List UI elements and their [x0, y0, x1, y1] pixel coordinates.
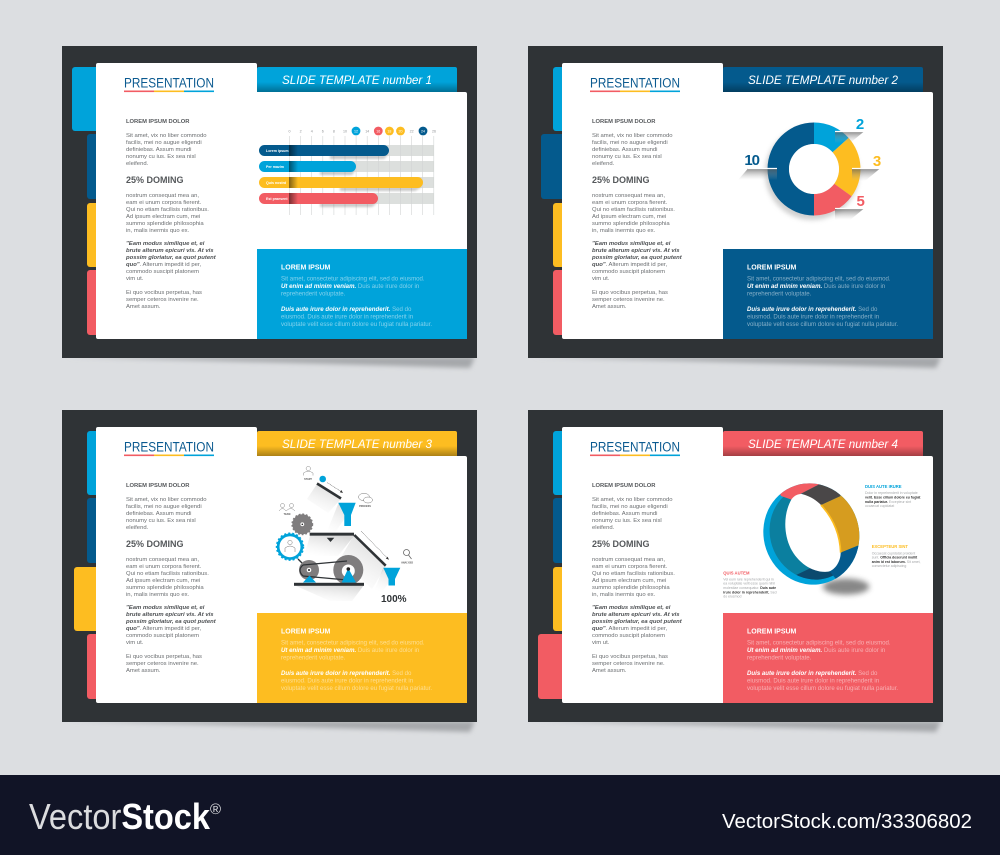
slide 1 colored text panel: LOREM IPSUM: [281, 264, 331, 272]
bar chart: Lorem ipsum: [266, 149, 289, 153]
footer logo: VectorStock: [29, 796, 211, 837]
bar chart: 26: [432, 129, 436, 133]
slide 4 header tab: [723, 431, 923, 458]
slide 4 body text: [591, 483, 683, 674]
slide 4 body text: commodo suscipit platonem: [592, 633, 665, 639]
bar chart: [259, 127, 436, 215]
slide 4 colored text panel: Ut enim ad minim veniam. Duis aute irure dolor in: [747, 647, 885, 654]
3D ring chart: [763, 483, 872, 599]
slide 4 body text: "Eam modus similique et, ei: [592, 605, 671, 611]
slide 4 body text: Sit amet, vix no liber commodo: [592, 497, 673, 503]
slide 3 body text: Qui no etiam facilisis rationibus.: [126, 571, 209, 577]
slide 3 colored text panel: Duis aute irure dolor in reprehenderit. Sed do: [281, 670, 412, 677]
registered mark: ®: [210, 801, 221, 818]
slide 3 body text: Sit amet, vix no liber commodo: [126, 497, 207, 503]
bar chart: Quis nostrd: [266, 181, 286, 185]
blue funnel 1: [338, 503, 356, 526]
slide 3 body text: in, malis inermis quo ex.: [126, 592, 190, 598]
slide 3 body text: vim ut.: [126, 640, 144, 646]
slide 2 header tab: [723, 67, 923, 94]
slide 2 body text: eleifend.: [592, 161, 615, 167]
slide 4 body text: nostrum consequat mea an,: [592, 557, 665, 563]
top conveyor with ball: [317, 476, 343, 498]
slide 2 body text: Ad ipsum electram cum, mei: [592, 214, 666, 220]
slide 2 body text: definiebas. Assum mundi: [592, 147, 658, 153]
slide 4 colored text panel: reprehenderit voluptate.: [747, 654, 812, 662]
slide 3 body text: nostrum consequat mea an,: [126, 557, 199, 563]
icon: chat bubbles: PROCESS: [359, 505, 371, 508]
slide 3 colored text panel: voluptate velit esse cillum dolore eu fugiat nulla pariatur.: [281, 685, 432, 692]
bar chart: 0: [288, 129, 290, 133]
slide 2 body text: summo splendide philosophia: [592, 221, 670, 227]
label 2: 2: [856, 116, 864, 133]
bar chart: 2: [300, 129, 302, 133]
slide 2 tab title: SLIDE TEMPLATE number 2: [748, 73, 898, 87]
slide 1 right white panel: [250, 92, 467, 339]
slide 2 colored text panel: reprehenderit voluptate.: [747, 290, 812, 298]
slide 2 presentation heading: PRESENTATION: [590, 76, 680, 90]
100 percent label: 100%: [381, 594, 407, 605]
slide 3 body text: possim gloriatur, ea quot putent: [125, 619, 217, 625]
slide 1 body text: semper ceteros invenire ne.: [126, 297, 199, 303]
callout: quis autem: do eiusmod: [723, 594, 741, 598]
slide 1 body text: definiebas. Assum mundi: [126, 147, 192, 153]
slide 1 colored text panel: voluptate velit esse cillum dolore eu fugiat nulla pariatur.: [281, 321, 432, 328]
slide 4 body text: possim gloriatur, ea quot putent: [591, 619, 683, 625]
slide 4 body text: definiebas. Assum mundi: [592, 511, 658, 517]
slide 3 body text: commodo suscipit platonem: [126, 633, 199, 639]
callout: quis autem: [723, 570, 777, 598]
slide 2 body text: possim gloriatur, ea quot putent: [591, 255, 683, 261]
slide 1 body text: Ad ipsum electram cum, mei: [126, 214, 200, 220]
callout: duis aute irure: Dolor in reprehenderit in voluptate: [865, 491, 918, 495]
bar chart: 4: [311, 129, 313, 133]
slide 4 body text: in, malis inermis quo ex.: [592, 592, 656, 598]
slide 4 body text: nonumy cu ius. Ex sea nisl: [592, 518, 662, 524]
slide 1 body text: quo". Alterum impedit id per,: [126, 262, 202, 268]
wheel hub: [346, 567, 350, 571]
bar chart: 18: [387, 129, 391, 133]
slide 3 body text: LOREM IPSUM DOLOR: [126, 483, 190, 489]
slide 3 dark frame: [62, 410, 477, 722]
slide 1 body text: facilis, mei no augue eligendi: [126, 140, 202, 146]
slide 2 colored text panel: Sit amet, consectetur adipiscing elit, sed do eiusmod.: [747, 276, 891, 282]
slide 4 body text: facilis, mei no augue eligendi: [592, 504, 668, 510]
slide 1 colored text panel: Sit amet, consectetur adipiscing elit, sed do eiusmod.: [281, 276, 425, 282]
slide 3 tab title: SLIDE TEMPLATE number 3: [282, 437, 432, 451]
bar chart: 8: [333, 129, 335, 133]
slide 3 body text: semper ceteros invenire ne.: [126, 661, 199, 667]
callout: duis aute irure: DUIS AUTE IRURE: [865, 484, 902, 489]
callout: excepteur sint: consectetur adipiscing: [872, 564, 906, 568]
callout: quis autem: Vel eum iure reprehenderit qui in: [723, 578, 774, 582]
slide 4 body text: vim ut.: [592, 640, 610, 646]
blue gear with person: [277, 534, 303, 560]
slide 2 dark frame: [528, 46, 943, 358]
callout: duis aute irure: [865, 484, 921, 508]
slide 2 colored text panel: Ut enim ad minim veniam. Duis aute irure dolor in: [747, 283, 885, 290]
callout: excepteur sint: sunt. Officia deserunt mollit: [872, 556, 918, 560]
slide 1 body text: Ei quo vocibus perpetua, has: [126, 290, 202, 296]
callout: duis aute irure: velit. Esse cillum dolore eu fugiat: [865, 496, 921, 500]
machine process diagram: [277, 466, 413, 605]
slide 4 colored text panel: Duis aute irure dolor in reprehenderit. Sed do: [747, 670, 878, 677]
sloped conveyor: [354, 531, 389, 566]
slide 4 side tabs: [538, 431, 568, 699]
slide 1 body text: [125, 119, 217, 310]
label 3: 3: [873, 153, 881, 170]
slide 4 body text: Ad ipsum electram cum, mei: [592, 578, 666, 584]
machine mounts: [303, 568, 356, 582]
slide 3 body text: nonumy cu ius. Ex sea nisl: [126, 518, 196, 524]
slide 1 body text: commodo suscipit platonem: [126, 269, 199, 275]
slide 3 body text: quo". Alterum impedit id per,: [126, 626, 202, 632]
label 10: 10: [744, 152, 760, 169]
slide 2 colored text panel: eiusmod. Duis aute irure dolor in reprehenderit in: [747, 314, 879, 320]
label 5: 5: [857, 193, 865, 210]
slide 1 colored text panel: reprehenderit voluptate.: [281, 290, 346, 298]
icon: magnifier: ANALYSIS: [401, 562, 413, 564]
footer image id: VectorStock.com/33306802: [722, 811, 972, 833]
slide 1 side tabs: [72, 67, 102, 335]
slide 2 colored text panel: LOREM IPSUM: [747, 264, 797, 272]
slide 1 dark frame: [62, 46, 477, 358]
bar chart: 14: [365, 129, 369, 133]
slide 3 colored text panel: LOREM IPSUM: [281, 628, 331, 636]
slide 1 body text: in, malis inermis quo ex.: [126, 228, 190, 234]
slide 1 body text: Amet assum.: [126, 304, 161, 310]
slide 2 body text: "Eam modus similique et, ei: [592, 241, 671, 247]
slide 3 body text: Ad ipsum electram cum, mei: [126, 578, 200, 584]
slide 2 body text: vim ut.: [592, 276, 610, 282]
callout: excepteur sint: EXCEPTEUR SINT: [872, 544, 908, 549]
bar chart: Per mazim: [266, 165, 284, 169]
slide 1 presentation heading: PRESENTATION: [124, 76, 214, 90]
slide 2 body text: Amet assum.: [592, 304, 627, 310]
slide 4 body text: eleifend.: [592, 525, 615, 531]
middle bar: [310, 533, 354, 542]
slide 4 colored text panel: voluptate velit esse cillum dolore eu fugiat nulla pariatur.: [747, 685, 898, 692]
slide 4 body text: Qui no etiam facilisis rationibus.: [592, 571, 675, 577]
slide 2 body text: nostrum consequat mea an,: [592, 193, 665, 199]
machine base: [294, 583, 364, 586]
slide 4 body text: summo splendide philosophia: [592, 585, 670, 591]
slide 4 dark frame: [528, 410, 943, 722]
slide 1 body text: nonumy cu ius. Ex sea nisl: [126, 154, 196, 160]
slide 3 right white panel: [250, 456, 467, 703]
slide 2 body text: [591, 119, 683, 310]
bar chart: Est praesent: [266, 197, 288, 201]
slide 2 body text: quo". Alterum impedit id per,: [592, 262, 668, 268]
slide 1 body text: 25% DOMING: [126, 175, 184, 185]
callout: excepteur sint: [872, 544, 921, 568]
slide 3 body text: summo splendide philosophia: [126, 585, 204, 591]
slide 4 right white panel: [716, 456, 933, 703]
callout: quis autem: molestiae consequatur. Duis aute: [723, 586, 776, 590]
footer bar: [0, 775, 1000, 855]
slide 2 body text: 25% DOMING: [592, 175, 650, 185]
slide 1 body text: possim gloriatur, ea quot putent: [125, 255, 217, 261]
callout: quis autem: ea voluptate velit esse quam nihil: [723, 582, 775, 586]
panel: slide template 3: [62, 410, 477, 732]
slide 2 side tabs: [541, 67, 568, 335]
panel: slide template 4: [528, 410, 943, 732]
slide 1 body text: vim ut.: [126, 276, 144, 282]
slide 3 presentation heading: PRESENTATION: [124, 440, 214, 454]
slide 4 left white page: [562, 427, 723, 703]
slide 3 body text: eleifend.: [126, 525, 149, 531]
panel: slide template 2: [528, 46, 943, 368]
slide 3 body text: "Eam modus similique et, ei: [126, 605, 205, 611]
slide 1 body text: LOREM IPSUM DOLOR: [126, 119, 190, 125]
slide 1 body text: eleifend.: [126, 161, 149, 167]
slide 2 colored text panel: [723, 249, 933, 339]
callout: excepteur sint: anim id est laborum. Sit amet,: [872, 560, 921, 564]
bar chart: 20: [398, 129, 402, 133]
bar chart: 10: [343, 129, 347, 133]
slide 1 body text: Qui no etiam facilisis rationibus.: [126, 207, 209, 213]
bar chart: 12: [354, 129, 358, 133]
slide 1 header tab: [257, 67, 457, 94]
slide 4 body text: Ei quo vocibus perpetua, has: [592, 654, 668, 660]
slide 2 body text: facilis, mei no augue eligendi: [592, 140, 668, 146]
slide 1 body text: "Eam modus similique et, ei: [126, 241, 205, 247]
bar chart: 6: [322, 129, 324, 133]
slide 4 colored text panel: LOREM IPSUM: [747, 628, 797, 636]
bar chart: 24: [421, 129, 425, 133]
slide 3 side tabs: [74, 431, 102, 699]
slide 3 header tab: [257, 431, 457, 458]
slide 2 body text: Sit amet, vix no liber commodo: [592, 133, 673, 139]
slide 4 presentation heading: PRESENTATION: [590, 440, 680, 454]
slide 3 body text: facilis, mei no augue eligendi: [126, 504, 202, 510]
slide 4 colored text panel: eiusmod. Duis aute irure dolor in reprehenderit in: [747, 678, 879, 684]
slide 1 colored text panel: Ut enim ad minim veniam. Duis aute irure dolor in: [281, 283, 419, 290]
slide 2 body text: commodo suscipit platonem: [592, 269, 665, 275]
slide 4 colored text panel: Sit amet, consectetur adipiscing elit, sed do eiusmod.: [747, 640, 891, 646]
slide 1 body text: brute alterum epicuri vis. At vis: [126, 248, 214, 254]
slide 4 colored text panel: [723, 613, 933, 703]
icon: team: TEAM: [284, 513, 290, 516]
slide 3 colored text panel: [257, 613, 467, 703]
slide 3 colored text panel: Ut enim ad minim veniam. Duis aute irure dolor in: [281, 647, 419, 654]
slide 2 body text: LOREM IPSUM DOLOR: [592, 119, 656, 125]
slide 2 body text: in, malis inermis quo ex.: [592, 228, 656, 234]
slide 4 body text: LOREM IPSUM DOLOR: [592, 483, 656, 489]
slide 4 body text: brute alterum epicuri vis. At vis: [592, 612, 680, 618]
callout: quis autem: QUIS AUTEM: [723, 570, 750, 576]
slide 2 body text: Ei quo vocibus perpetua, has: [592, 290, 668, 296]
slide 2 body text: brute alterum epicuri vis. At vis: [592, 248, 680, 254]
slide 4 body text: Amet assum.: [592, 668, 627, 674]
slide 3 body text: 25% DOMING: [126, 539, 184, 549]
slide 3 body text: [125, 483, 217, 674]
slide 1 body text: nostrum consequat mea an,: [126, 193, 199, 199]
slide 3 colored text panel: Sit amet, consectetur adipiscing elit, sed do eiusmod.: [281, 640, 425, 646]
slide 2 body text: eam ei unum corpora fierent.: [592, 200, 668, 206]
slide 1 tab title: SLIDE TEMPLATE number 1: [282, 73, 432, 87]
slide 1 body text: Sit amet, vix no liber commodo: [126, 133, 207, 139]
slide 3 body text: definiebas. Assum mundi: [126, 511, 192, 517]
slide 2 body text: semper ceteros invenire ne.: [592, 297, 665, 303]
slide 1 left white page: [96, 63, 257, 339]
slide 3 left white page: [96, 427, 257, 703]
slide 1 body text: summo splendide philosophia: [126, 221, 204, 227]
bar chart: 16: [376, 129, 380, 133]
donut chart: [738, 116, 881, 220]
slide 2 left white page: [562, 63, 723, 339]
slide 1 colored text panel: Duis aute irure dolor in reprehenderit. Sed do: [281, 306, 412, 313]
slide 4 body text: quo". Alterum impedit id per,: [592, 626, 668, 632]
slide 2 body text: Qui no etiam facilisis rationibus.: [592, 207, 675, 213]
callout: duis aute irure: nulla pariatur. Excepteur sint: [865, 500, 911, 504]
slide 3 body text: Amet assum.: [126, 668, 161, 674]
slide 3 body text: Ei quo vocibus perpetua, has: [126, 654, 202, 660]
slide 4 tab title: SLIDE TEMPLATE number 4: [748, 437, 898, 451]
gray gear: [292, 514, 312, 534]
slide 3 body text: brute alterum epicuri vis. At vis: [126, 612, 214, 618]
wheels and belt: [298, 555, 363, 585]
callout: excepteur sint: Occaecat cupidatat proident: [872, 552, 915, 556]
slide 4 body text: eam ei unum corpora fierent.: [592, 564, 668, 570]
slide 3 colored text panel: eiusmod. Duis aute irure dolor in reprehenderit in: [281, 678, 413, 684]
callout: duis aute irure: occaecat cupidatat: [865, 504, 894, 508]
blue funnel 2: [383, 568, 400, 586]
slide 2 body text: nonumy cu ius. Ex sea nisl: [592, 154, 662, 160]
slide 4 body text: semper ceteros invenire ne.: [592, 661, 665, 667]
slide 1 colored text panel: [257, 249, 467, 339]
slide 1 colored text panel: eiusmod. Duis aute irure dolor in reprehenderit in: [281, 314, 413, 320]
slide 3 colored text panel: reprehenderit voluptate.: [281, 654, 346, 662]
slide 2 colored text panel: Duis aute irure dolor in reprehenderit. Sed do: [747, 306, 878, 313]
slide 1 body text: eam ei unum corpora fierent.: [126, 200, 202, 206]
slide 4 body text: 25% DOMING: [592, 539, 650, 549]
slide 2 colored text panel: voluptate velit esse cillum dolore eu fugiat nulla pariatur.: [747, 321, 898, 328]
icon: person: START: [304, 478, 312, 481]
slide 2 right white panel: [716, 92, 933, 339]
bar chart: 22: [410, 129, 414, 133]
callout: quis autem: irure dolor in reprehenderit. Sed: [723, 590, 777, 594]
panel: slide template 1: [62, 46, 477, 368]
slide 3 body text: eam ei unum corpora fierent.: [126, 564, 202, 570]
